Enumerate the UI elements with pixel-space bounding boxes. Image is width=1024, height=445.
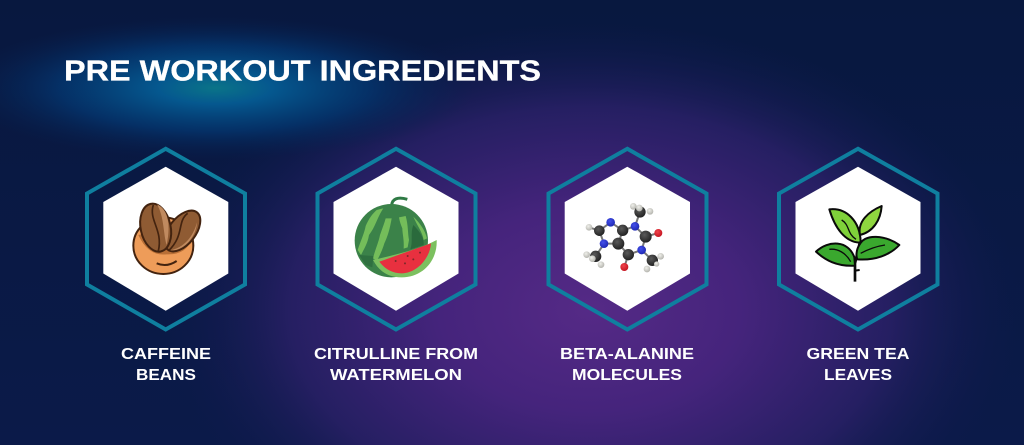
panel: green tea leaves (779, 149, 938, 384)
label: caffeine beans: BEANS (136, 367, 196, 384)
label: caffeine beans: CAFFEINE (121, 346, 211, 363)
panel: citrulline from watermelon (314, 149, 478, 384)
label: green tea leaves: LEAVES (824, 367, 892, 384)
label: beta-alanine molecules: MOLECULES (572, 367, 682, 384)
label: beta-alanine molecules: BETA-ALANINE (560, 346, 694, 363)
label: beta-alanine molecules (560, 346, 694, 384)
panel: caffeine beans (87, 149, 245, 384)
white hexagon (103, 167, 228, 311)
white hexagon (565, 167, 690, 311)
white hexagon (334, 167, 458, 311)
icon: coffee beans (133, 201, 207, 274)
label: green tea leaves: GREEN TEA (806, 346, 910, 363)
panel: beta-alanine molecules (548, 149, 706, 384)
icon: watermelon (355, 198, 437, 277)
label: citrulline from watermelon: WATERMELON (330, 367, 462, 384)
label: citrulline from watermelon: CITRULLINE FROM (314, 346, 478, 363)
icon: molecule (583, 203, 664, 272)
label: green tea leaves (806, 346, 910, 384)
outer hexagon (548, 149, 706, 330)
outer hexagon (87, 149, 245, 330)
outer hexagon (779, 149, 938, 330)
white hexagon (796, 167, 920, 311)
icon: tea leaves (816, 206, 899, 282)
title: PRE WORKOUT INGREDIENTS (64, 56, 541, 88)
outer hexagon (318, 149, 476, 330)
label: citrulline from watermelon (314, 346, 478, 384)
label: caffeine beans (121, 346, 211, 384)
